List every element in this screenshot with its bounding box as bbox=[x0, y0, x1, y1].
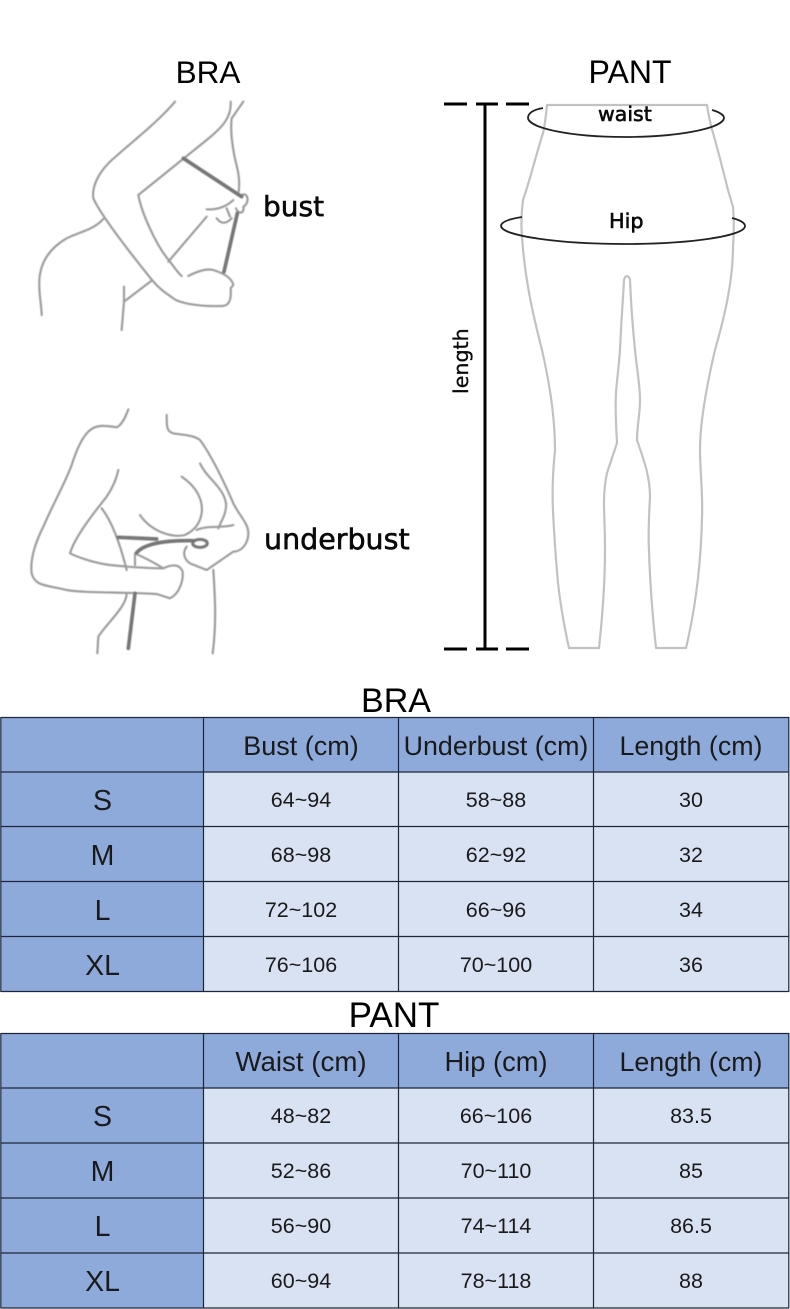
table: PANT sizes: Waist (cm) bbox=[235, 1046, 367, 1077]
illustration: bust measurement bbox=[39, 102, 248, 330]
label: bust: bust bbox=[263, 190, 324, 223]
table: BRA sizes: 72~102 bbox=[265, 898, 337, 922]
illustration: underbust measurement bbox=[31, 409, 248, 653]
table: PANT sizes: 74~114 bbox=[461, 1214, 531, 1238]
table: BRA sizes: 30 bbox=[679, 788, 703, 812]
table: BRA sizes: 76~106 bbox=[265, 953, 337, 977]
table: BRA sizes: S bbox=[93, 785, 112, 817]
table: BRA sizes: M bbox=[91, 840, 114, 872]
table: PANT sizes: L bbox=[95, 1211, 110, 1243]
table: PANT sizes: 88 bbox=[679, 1269, 703, 1293]
table: PANT sizes: 86.5 bbox=[670, 1214, 712, 1238]
label: underbust: underbust bbox=[264, 523, 410, 556]
table: BRA sizes: 64~94 bbox=[271, 788, 331, 812]
label: length: length bbox=[449, 328, 473, 394]
table: BRA sizes bbox=[1, 717, 789, 992]
label: waist: waist bbox=[598, 102, 652, 126]
table: PANT sizes: 56~90 bbox=[271, 1214, 331, 1238]
table: PANT sizes: 52~86 bbox=[271, 1159, 331, 1183]
heading: PANT diagram: PANT bbox=[589, 54, 671, 90]
measuring loop: hip bbox=[501, 217, 745, 244]
table: BRA sizes: Underbust (cm) bbox=[404, 731, 588, 761]
table: PANT sizes: 70~110 bbox=[461, 1159, 531, 1183]
heading: PANT table: PANT bbox=[349, 996, 439, 1035]
measuring loop: waist bbox=[528, 108, 724, 137]
table: BRA sizes: L bbox=[95, 895, 110, 927]
table: BRA sizes: 62~92 bbox=[466, 843, 526, 867]
table: BRA sizes: 34 bbox=[679, 898, 703, 922]
table: PANT sizes: 60~94 bbox=[271, 1269, 331, 1293]
heading: BRA diagram: BRA bbox=[176, 54, 240, 90]
table: PANT sizes: XL bbox=[85, 1266, 120, 1298]
table: PANT sizes: 78~118 bbox=[461, 1269, 531, 1293]
table: PANT sizes: Length (cm) bbox=[620, 1047, 762, 1077]
dimension line: length bbox=[444, 104, 529, 649]
table: BRA sizes: Length (cm) bbox=[620, 731, 762, 761]
table: PANT sizes: M bbox=[91, 1156, 114, 1188]
table: PANT sizes: 66~106 bbox=[460, 1104, 532, 1128]
table: PANT sizes: 85 bbox=[679, 1159, 703, 1183]
table: BRA sizes: 68~98 bbox=[271, 843, 331, 867]
table: BRA sizes: 66~96 bbox=[466, 898, 526, 922]
table: PANT sizes: S bbox=[93, 1101, 112, 1133]
table: BRA sizes: 32 bbox=[679, 843, 703, 867]
table: BRA sizes: 58~88 bbox=[466, 788, 526, 812]
label: Hip: Hip bbox=[609, 209, 644, 233]
table: PANT sizes: 48~82 bbox=[271, 1104, 331, 1128]
heading: BRA table: BRA bbox=[361, 682, 431, 720]
table: PANT sizes: 83.5 bbox=[670, 1104, 712, 1128]
table: BRA sizes: XL bbox=[85, 950, 120, 982]
table: PANT sizes: Hip (cm) bbox=[444, 1046, 548, 1077]
table: BRA sizes: 36 bbox=[679, 953, 703, 977]
illustration: leggings outline bbox=[521, 105, 734, 648]
table: BRA sizes: 70~100 bbox=[460, 953, 532, 977]
table: PANT sizes bbox=[1, 1033, 789, 1308]
table: BRA sizes: Bust (cm) bbox=[243, 731, 359, 761]
